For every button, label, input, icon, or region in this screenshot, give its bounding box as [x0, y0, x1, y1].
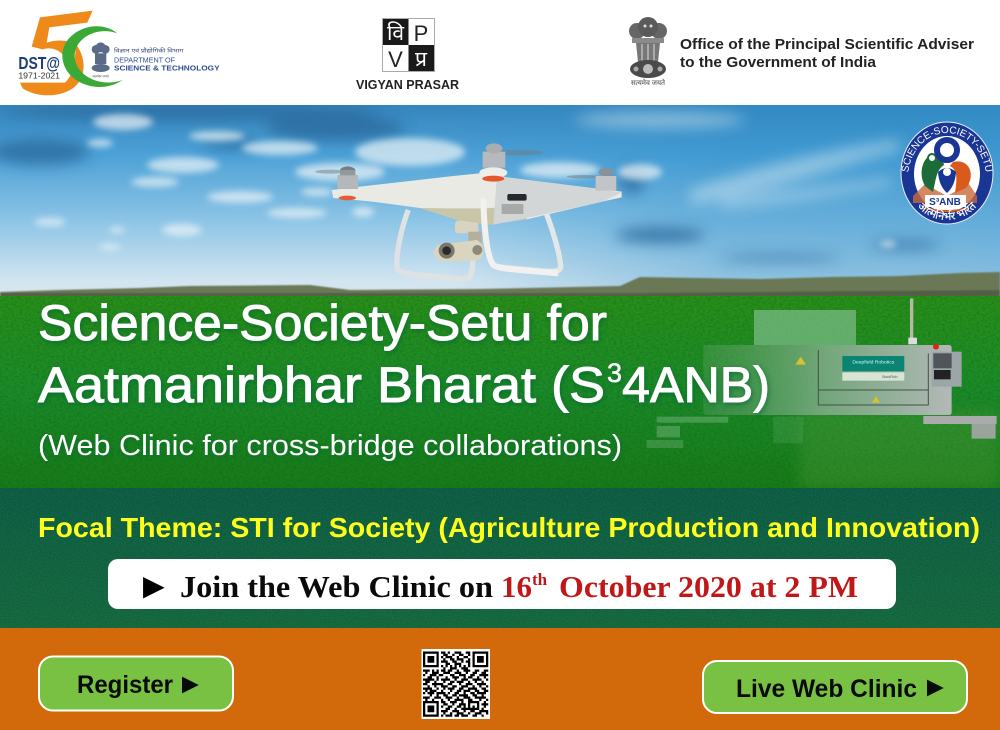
- title: 3: [607, 358, 622, 388]
- callout: join date: [108, 559, 896, 609]
- landing gear rear: [397, 210, 473, 279]
- icon: figures: [922, 154, 944, 192]
- button: register: [39, 656, 233, 710]
- logo: Office of the PSA: Office of the Principal Scientific Adviser: [680, 36, 974, 53]
- button: live web clinic: ►: [922, 671, 949, 702]
- badge: Science-Society-Setu: आत्मनिर्भर भारत: [919, 202, 976, 220]
- badge: Science-Society-Setu: [900, 122, 994, 224]
- button: register: ►: [176, 668, 204, 699]
- logo: Office of the PSA: to the Government of India: [680, 54, 877, 71]
- logo: Vigyan Prasar: वि: [387, 21, 404, 45]
- motors: [337, 143, 616, 200]
- rotor blur: [315, 150, 600, 178]
- focal theme heading: Focal Theme: STI for Society (Agriculture Production and Innovation): [38, 512, 980, 543]
- callout: join date: Join the Web Clinic on: [180, 569, 493, 604]
- logo: DST 50 years: DST@: [18, 53, 60, 73]
- badge: Science-Society-Setu: S³ANB: [929, 197, 961, 208]
- header logo bar: [0, 0, 1000, 105]
- callout: join date: 16: [501, 569, 532, 604]
- QR code: [422, 649, 490, 719]
- hero photo: field robot machine: [647, 298, 997, 448]
- logo: Office of the PSA: [629, 17, 974, 87]
- icon: bridge: [913, 184, 977, 203]
- hero photo: field robot machine: Deepfield Robotics: [852, 359, 895, 365]
- panel: action bar: [0, 628, 1000, 730]
- icon: national emblem small: [92, 42, 110, 72]
- hero photo: field robot machine: BoniRob: [882, 374, 898, 379]
- treeline: [0, 272, 1000, 297]
- logo: Vigyan Prasar: P: [414, 21, 428, 46]
- body: [332, 173, 622, 225]
- clouds: white: [34, 114, 896, 250]
- title: 4ANB): [622, 357, 770, 413]
- logo: DST 50 years: विज्ञान एवं प्रौद्योगिकी विभाग: [114, 47, 184, 55]
- button: live web clinic: Live Web Clinic: [736, 675, 917, 703]
- logo: DST 50 years: सत्यमेव जयते: [93, 74, 109, 78]
- title: [38, 295, 770, 413]
- button: live web clinic: [703, 661, 967, 713]
- landing gear front: [483, 198, 558, 273]
- title: Aatmanirbhar Bharat (S: [38, 357, 605, 413]
- logo: DST 50 years: [18, 11, 220, 95]
- callout: join date: ►: [136, 565, 172, 606]
- subtitle: (Web Clinic for cross-bridge collaborations): [38, 430, 622, 462]
- clouds: dark: [0, 104, 940, 261]
- panel: focal theme band: [0, 488, 1000, 628]
- logo: Vigyan Prasar: V: [388, 47, 403, 72]
- hero photo: field: [0, 296, 1000, 488]
- logo: DST 50 years: SCIENCE & TECHNOLOGY: [114, 63, 220, 72]
- hero photo: sky: [0, 104, 1000, 297]
- camera gimbal: [455, 221, 478, 233]
- callout: join date: October 2020 at 2 PM: [559, 569, 858, 604]
- clouds: cirrus streaks: [575, 112, 900, 208]
- badge: Science-Society-Setu: SCIENCE-SOCIETY-SETU: [902, 126, 992, 172]
- title: Science-Society-Setu for: [38, 295, 607, 351]
- icon: gear: [937, 140, 957, 160]
- button: register: Register: [77, 671, 173, 699]
- logo: Vigyan Prasar: [356, 18, 460, 92]
- logo: Vigyan Prasar: VIGYAN PRASAR: [356, 77, 460, 92]
- hero photo: drone: [315, 143, 622, 279]
- logo: DST 50 years: 1971-2021: [18, 70, 60, 80]
- callout: join date: th: [532, 570, 548, 589]
- logo: Vigyan Prasar: प्र: [415, 48, 428, 71]
- logo: DST 50 years: DEPARTMENT OF: [114, 55, 175, 64]
- icon: national emblem: [629, 17, 667, 87]
- icon: national emblem: सत्यमेव जयते: [631, 78, 666, 87]
